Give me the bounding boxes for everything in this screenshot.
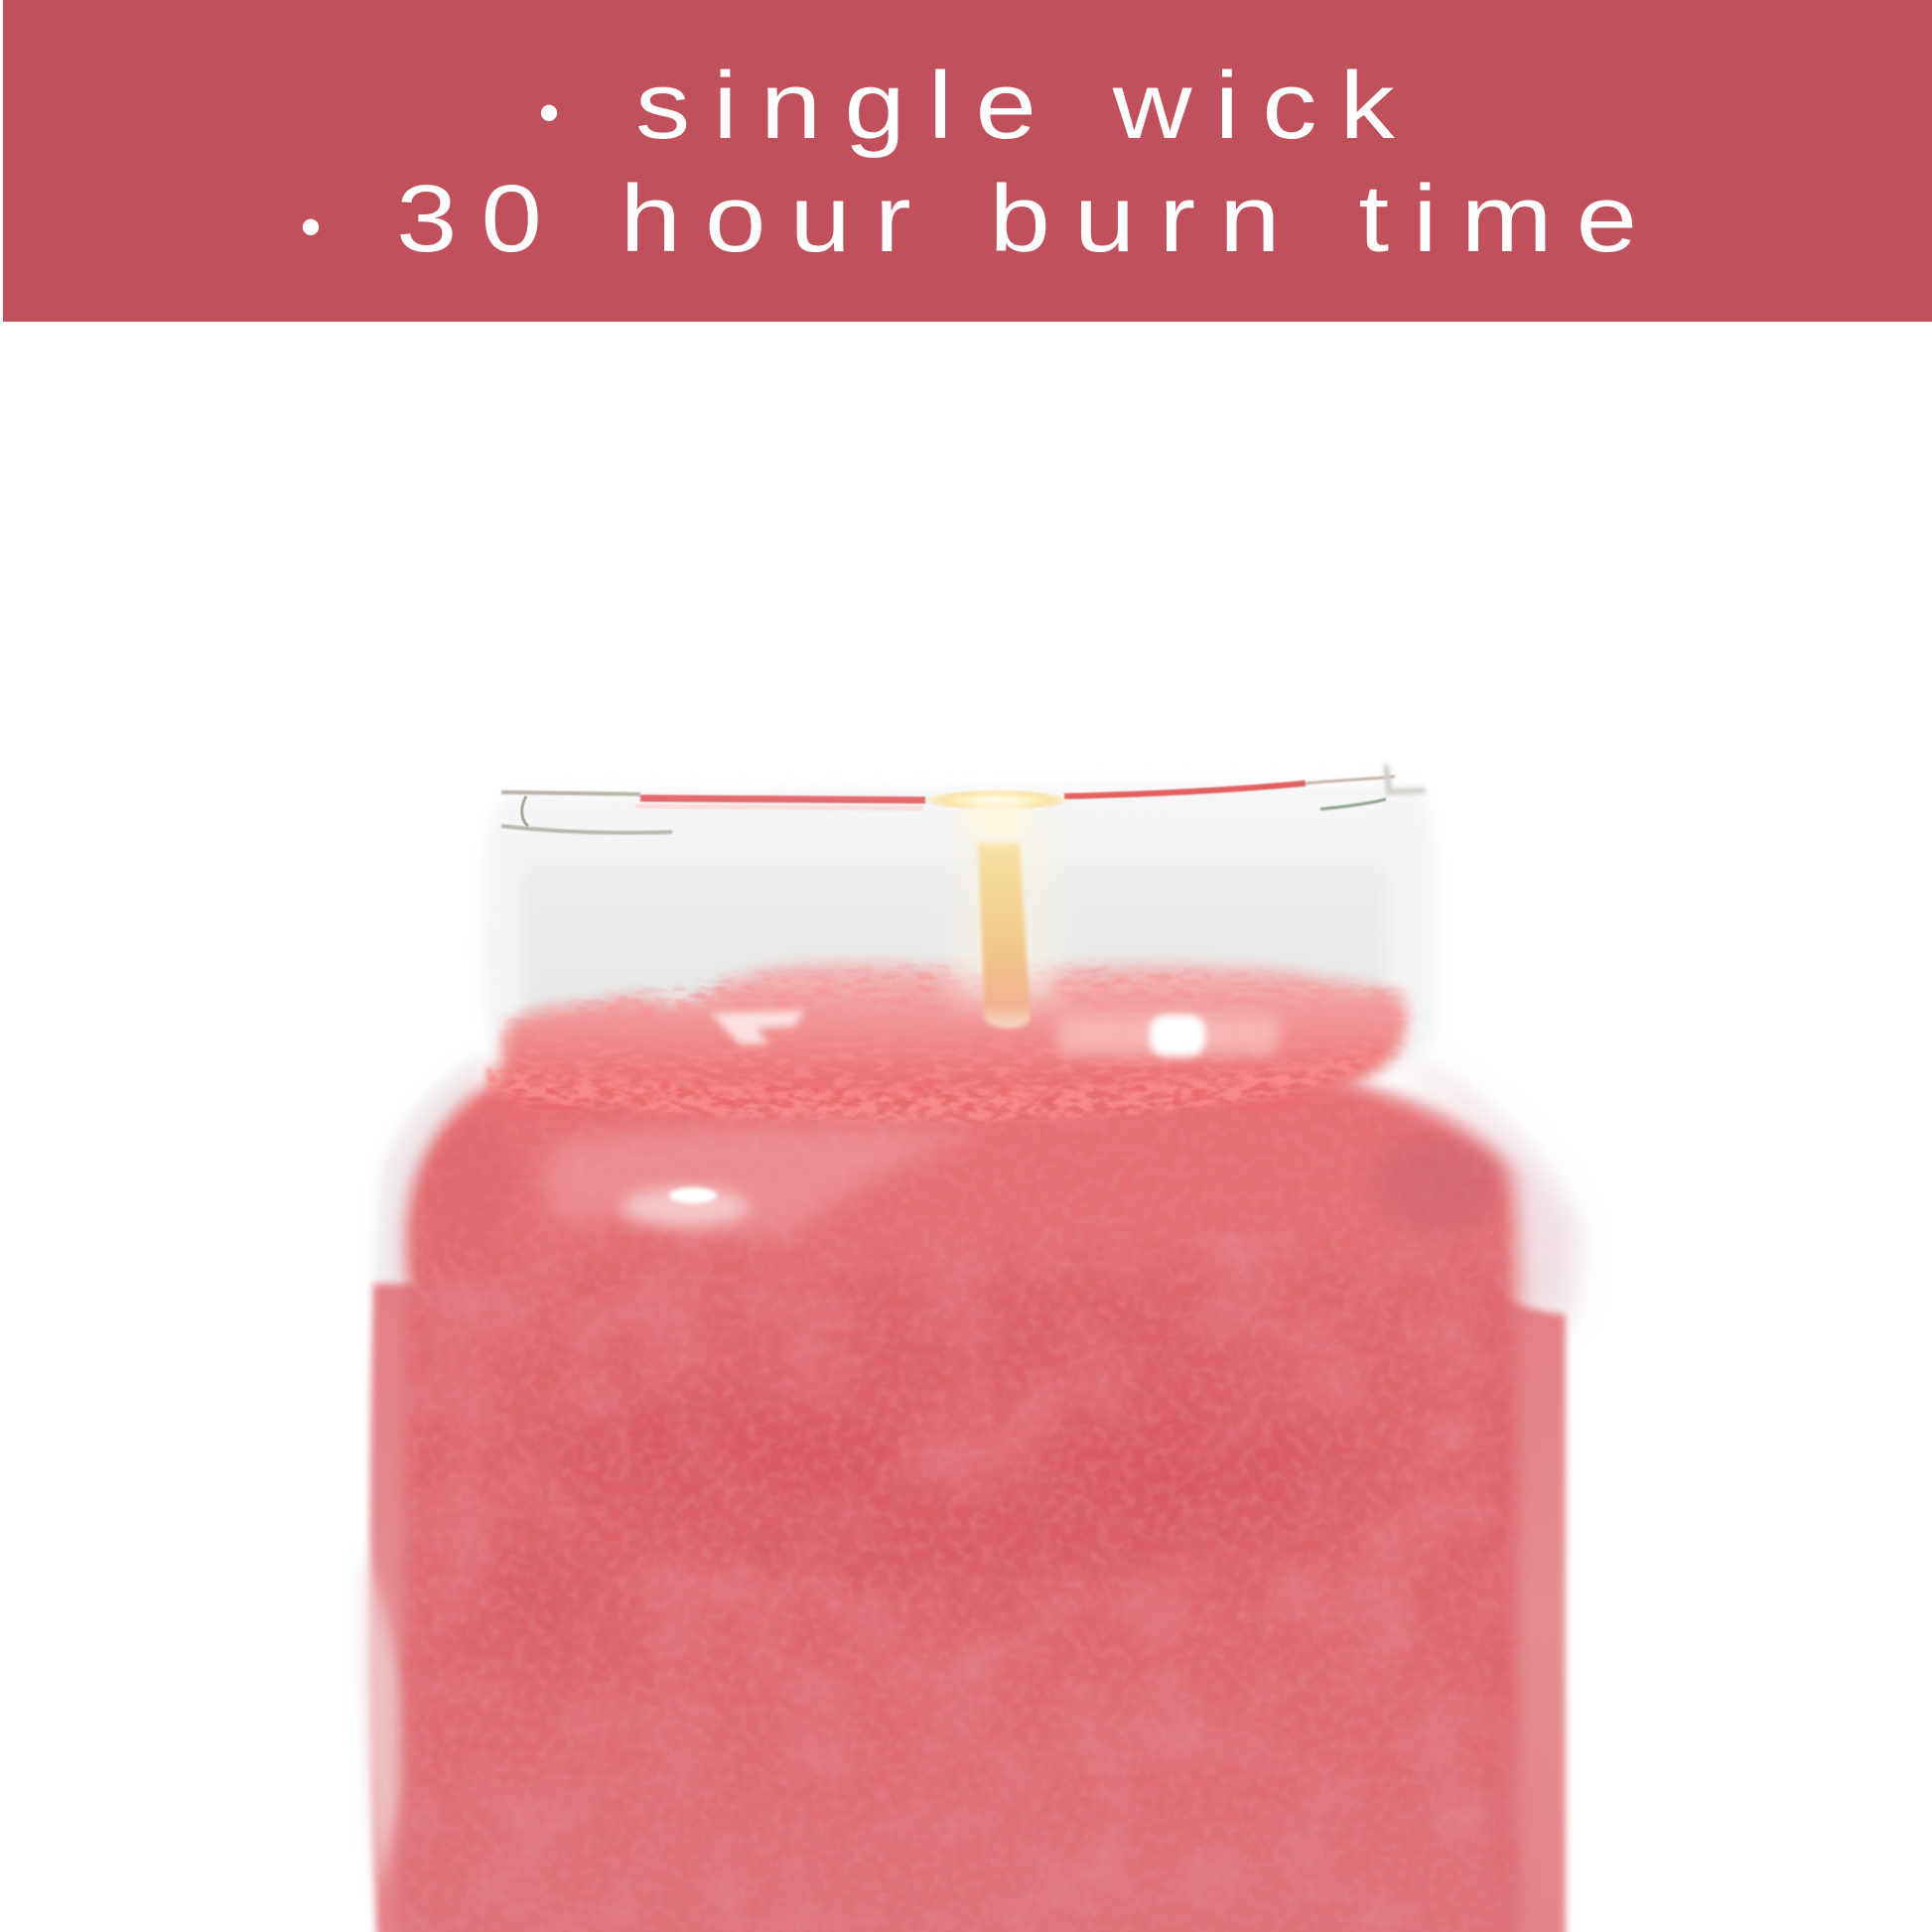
jar main body wax [390,1075,1526,1932]
pale strip on left side [362,1549,415,1896]
neck wax speckled red edge [482,1059,1366,1124]
shoulder muted tone [417,1112,1529,1932]
banner background [3,0,1932,322]
feature text: 30 hour burn time: 30 hour burn time [396,165,1637,271]
jar rim [501,764,1426,833]
neck wax speckle [498,961,1412,1113]
wax in jar neck [482,955,1418,1123]
darker wax clouds [566,1324,1352,1630]
candle wick and flame [922,789,1071,1029]
wax large mottling [407,1231,1511,1929]
jar glass neck [483,784,1436,1072]
jar shoulder glass halo [375,1052,1579,1320]
panel: top banner [3,0,1932,322]
wax shoulder shine [542,1125,993,1241]
wax top highlights [710,1011,1279,1056]
feature text: single wick: single wick [635,52,1395,158]
feature text: single wick: • [538,79,560,146]
candle jar illustration [347,764,1598,1932]
jar lower body outer layer [362,1284,1566,1932]
wax fine speckle [405,1104,1514,1932]
feature text: 30 hour burn time: • [300,194,322,260]
